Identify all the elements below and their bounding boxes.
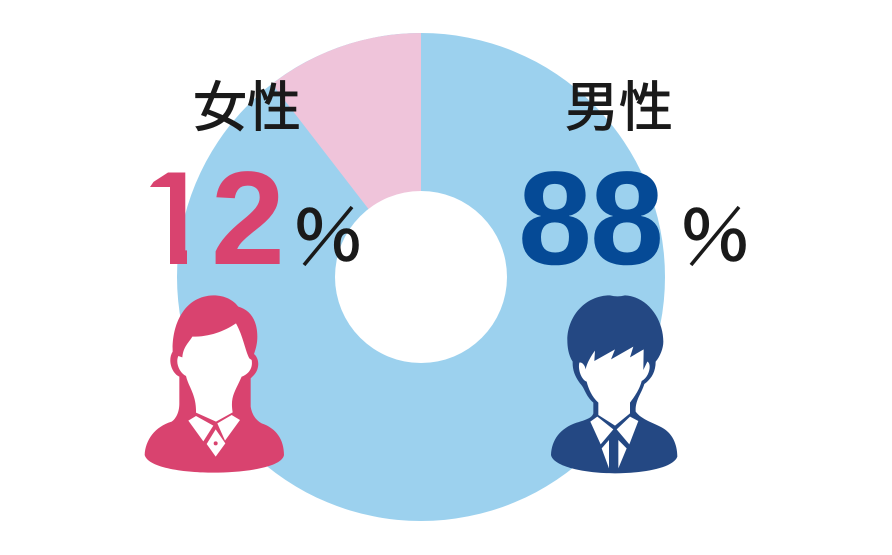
icon: businessman <box>551 295 677 473</box>
value: male 88: 8 <box>590 145 664 293</box>
percent sign: female: ％ <box>293 181 363 282</box>
value: male 88: 8 <box>518 145 592 293</box>
value: female 12 <box>150 171 280 264</box>
label: male: 男性 <box>565 78 673 138</box>
percent sign: female <box>297 206 359 266</box>
label: female: 女性 <box>193 78 301 138</box>
value: female 12: 1 <box>136 145 210 293</box>
percent sign: male <box>684 206 746 266</box>
icon: businesswoman <box>145 295 284 473</box>
donut chart <box>177 33 665 521</box>
percent sign: male: ％ <box>680 181 750 282</box>
value: female 12: 2 <box>211 145 285 293</box>
